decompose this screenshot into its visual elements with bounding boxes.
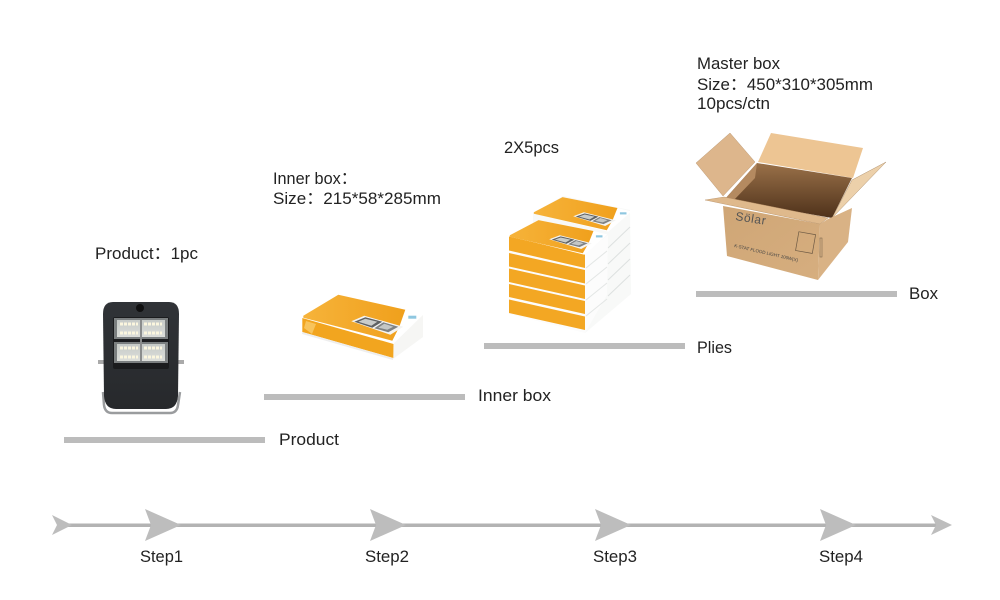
layer fronts — [509, 236, 585, 268]
text: master box details: 10pcs/ctn — [697, 94, 770, 113]
icon: inner box — [302, 295, 423, 360]
timeline arrow — [52, 509, 952, 541]
text: inner box size — [273, 169, 441, 208]
text: master box details: Size：450*310*305mm — [697, 75, 873, 94]
label: product: Product — [279, 430, 339, 449]
text: stack quantity: 2X5pcs — [504, 138, 559, 157]
step label 2: Step2 — [365, 547, 409, 566]
platform bar: box — [696, 291, 897, 297]
platform bar: plies — [484, 343, 685, 349]
step label 4: Step4 — [819, 547, 863, 566]
carton brand: Sölar — [735, 209, 767, 228]
front stack body — [509, 235, 608, 333]
text: inner box size: Size：215*58*285mm — [273, 189, 441, 208]
text: master box details — [697, 54, 873, 113]
label: box: Box — [909, 284, 938, 303]
back stack — [533, 196, 631, 333]
text: inner box size: Inner box： — [273, 169, 357, 188]
step label 3: Step3 — [593, 547, 637, 566]
label: plies: Plies — [697, 338, 732, 357]
step label 1: Step1 — [140, 547, 183, 566]
carton caption: K-STAT FLOOD LIGHT 100W(X) — [734, 243, 799, 263]
icon: stacked inner boxes — [509, 196, 631, 333]
icon: open carton — [696, 133, 886, 280]
label: inner box: Inner box — [478, 386, 552, 405]
text: master box details: Master box — [697, 54, 780, 73]
platform bar: inner box — [264, 394, 465, 400]
platform bar: product — [64, 437, 265, 443]
text: product quantity: Product：1pc — [95, 244, 198, 263]
icon: solar flood light — [98, 302, 184, 413]
